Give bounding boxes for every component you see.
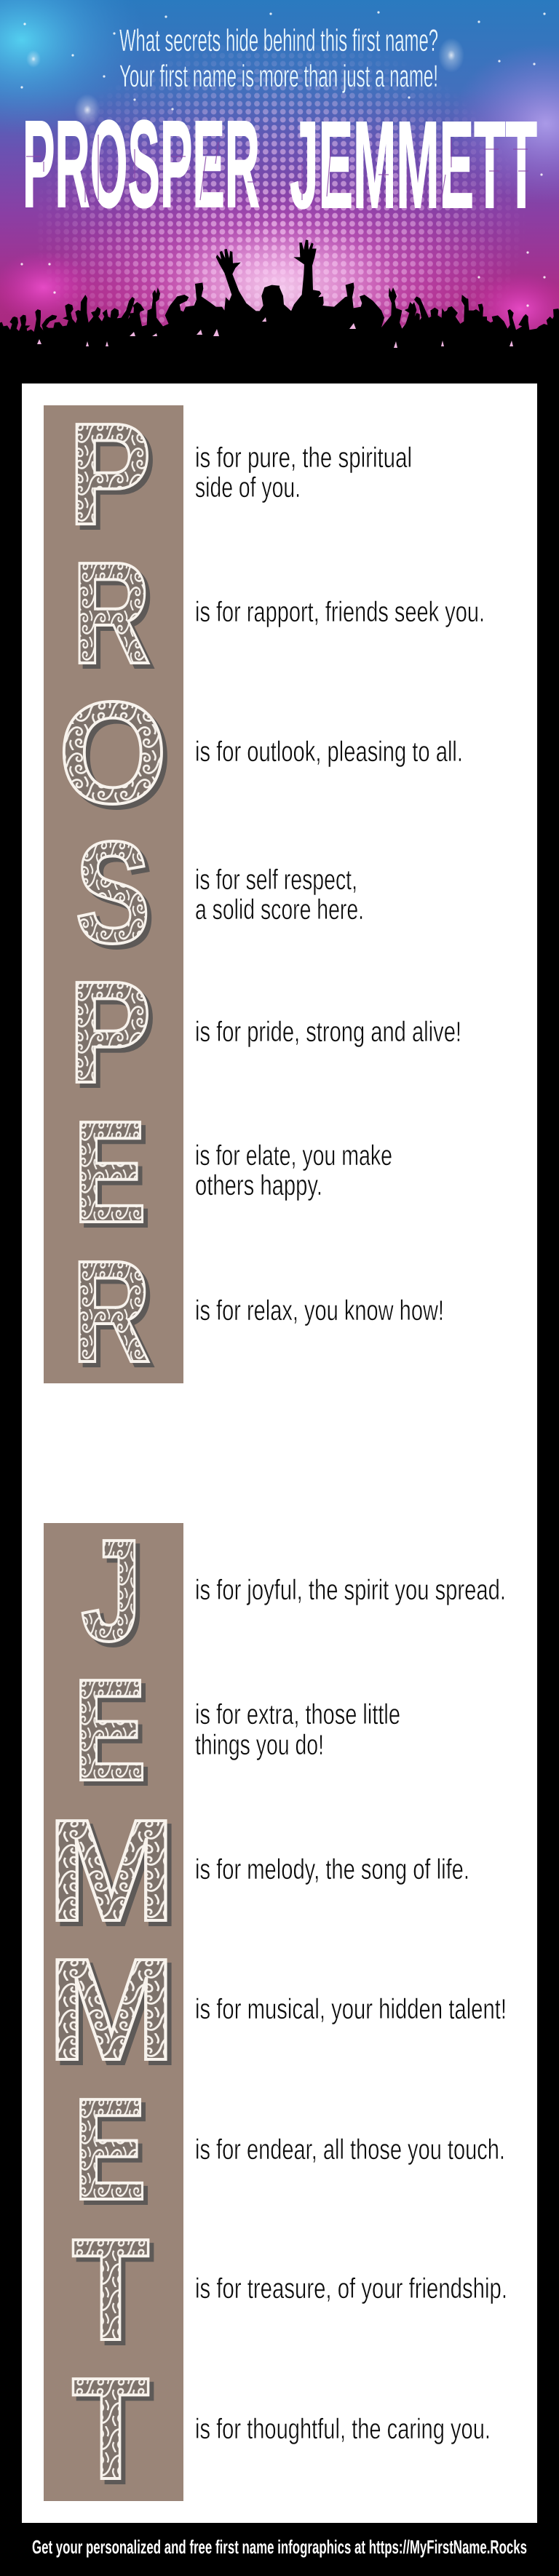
letter P: P — [68, 394, 151, 555]
letter T: T — [72, 2348, 149, 2509]
letter O: O — [58, 672, 167, 834]
header banner — [0, 0, 559, 386]
description: pure — [195, 442, 412, 504]
letter T: T — [72, 2209, 149, 2370]
description: elate: others happy. — [195, 1170, 322, 1201]
row: R rapport — [72, 533, 485, 694]
description: pride: is for pride, strong and alive! — [195, 1017, 461, 1048]
description: pure: side of you. — [195, 472, 301, 504]
sparkles — [20, 11, 546, 307]
row: E elate — [74, 1092, 392, 1253]
letter J: J — [81, 1510, 142, 1671]
row: S self respect — [75, 811, 364, 973]
row: E extra — [74, 1650, 400, 1811]
crowd silhouette — [0, 239, 559, 386]
letter M: M — [47, 1789, 176, 1951]
letter S: S — [75, 811, 151, 973]
description: elate: is for elate, you make — [195, 1140, 392, 1172]
description: melody: is for melody, the song of life. — [195, 1854, 469, 1885]
letter R: R — [72, 533, 151, 694]
letter P: P — [68, 952, 151, 1113]
row: P pure — [68, 394, 412, 555]
letter R: R — [72, 1231, 151, 1393]
panel: PROSPER letter column — [44, 405, 183, 1383]
description: pure: is for pure, the spiritual — [195, 442, 412, 474]
stage backdrop — [0, 0, 559, 332]
letter E: E — [74, 1092, 146, 1253]
panel: JEMMETT letter column — [44, 1523, 183, 2501]
row: M melody — [47, 1789, 469, 1951]
description: extra: things you do! — [195, 1730, 324, 1761]
description: outlook: is for outlook, pleasing to all. — [195, 736, 463, 768]
row: T treasure — [72, 2209, 507, 2370]
row: P pride — [68, 952, 461, 1113]
description: self respect: a solid score here. — [195, 894, 364, 926]
crowd gaps — [37, 317, 513, 348]
row: J joyful — [81, 1510, 506, 1671]
row: R relax — [72, 1231, 444, 1393]
letter M: M — [47, 1928, 176, 2090]
panel: white content card — [22, 383, 537, 2523]
row: T thoughtful — [72, 2348, 491, 2509]
description: extra — [195, 1699, 400, 1761]
description: self respect: is for self respect, — [195, 864, 357, 896]
letter E: E — [74, 1650, 146, 1811]
description: self respect — [195, 864, 364, 926]
row: M musical — [47, 1928, 507, 2090]
description: relax: is for relax, you know how! — [195, 1295, 444, 1327]
description: elate — [195, 1140, 392, 1201]
row: E endear — [74, 2069, 505, 2230]
letter E: E — [74, 2069, 146, 2230]
tagline — [119, 23, 438, 94]
row: O outlook — [58, 672, 463, 834]
description: extra: is for extra, those little — [195, 1699, 400, 1730]
